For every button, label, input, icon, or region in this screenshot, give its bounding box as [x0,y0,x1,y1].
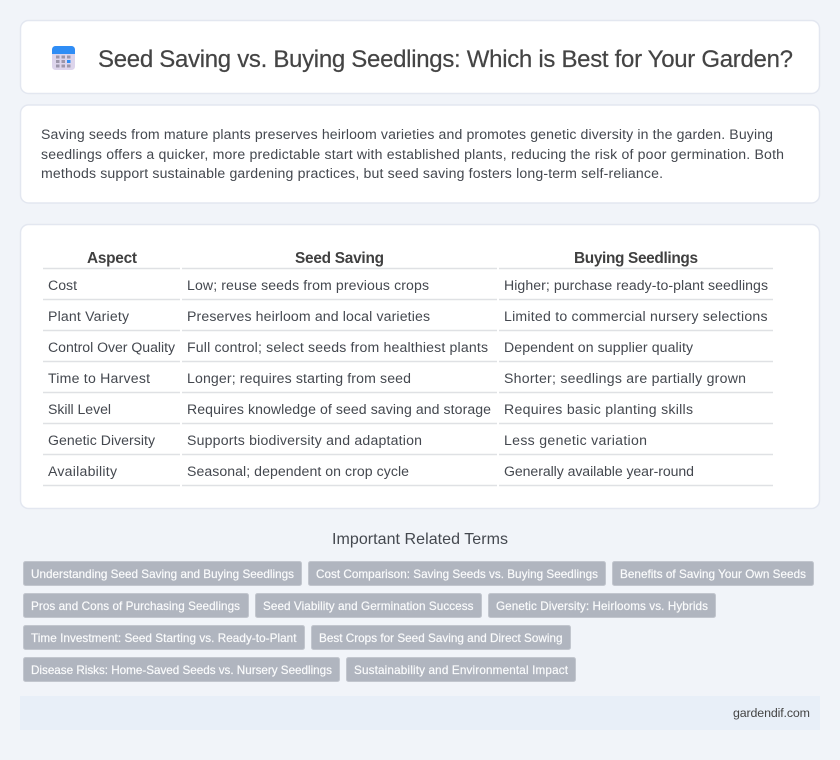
table row: availability [48,463,694,479]
text block: introduction: seedlings offers a quicker, more predictable start with established plants, reducing the risk of poor germination. Both [41,146,784,162]
tag [24,562,302,586]
tag: Benefits of Saving Your Own Seeds [620,568,806,581]
tag: Cost Comparison: Saving Seeds vs. Buying Seedlings [316,568,598,581]
table header: Seed Saving [295,250,384,267]
table row: cost: Low; reuse seeds from previous crops [187,277,429,293]
tag [312,626,570,650]
table row: genetic diversity: Less genetic variation [504,432,647,448]
table row: cost: Higher; purchase ready-to-plant seedlings [504,277,768,293]
footer [20,696,820,730]
table row: genetic diversity [48,432,647,448]
title: Seed Saving vs. Buying Seedlings: Which is Best for Your Garden? [98,46,793,73]
tag: Pros and Cons of Purchasing Seedlings [31,600,240,613]
table row: availability: Seasonal; dependent on crop cycle [187,463,409,479]
table row: time to harvest: Shorter; seedlings are partially grown [504,370,746,386]
table row: skill level: Requires knowledge of seed saving and storage [187,401,491,417]
table row: availability: Generally available year-round [504,463,694,479]
tag [24,626,304,650]
text block: introduction: Saving seeds from mature plants preserves heirloom varieties and promotes genetic diversity in the garden. Buying [41,126,773,142]
text block: introduction [41,126,784,181]
table row: plant variety: Limited to commercial nursery selections [504,308,768,324]
table row: plant variety: Plant Variety [48,308,130,324]
tag group: related terms [24,562,814,682]
tag: Sustainability and Environmental Impact [354,664,569,677]
tag: Best Crops for Seed Saving and Direct Sowing [319,632,562,645]
table row: time to harvest: Time to Harvest [48,370,150,386]
table row: control over quality: Control Over Quality [48,339,176,355]
table header [87,250,698,267]
tag [308,562,606,586]
table row: control over quality: Dependent on supplier quality [504,339,694,355]
tag: Time Investment: Seed Starting vs. Ready-to-Plant [31,632,297,645]
table row: plant variety: Preserves heirloom and local varieties [187,308,430,324]
tag: Understanding Seed Saving and Buying Seedlings [31,568,294,581]
table row: availability: Availability [48,463,118,479]
tag: Genetic Diversity: Heirlooms vs. Hybrids [496,600,708,613]
panel: introduction [20,105,820,203]
table row: cost: Cost [48,277,77,293]
panel: comparison table [20,224,820,508]
tag [488,594,716,618]
heading: important related terms: Important Related Terms [332,531,508,548]
table header: Buying Seedlings [574,250,698,267]
table header: Aspect [87,250,137,267]
table row: control over quality [48,339,694,355]
table row: genetic diversity: Supports biodiversity and adaptation [187,432,422,448]
table row: skill level [48,401,693,417]
tag: Disease Risks: Home-Saved Seeds vs. Nursery Seedlings [31,664,332,677]
tag [24,594,248,618]
panel: header [20,20,820,94]
table row: skill level: Requires basic planting skills [504,401,693,417]
tag [346,658,576,682]
table row: time to harvest [48,370,746,386]
table row: control over quality: Full control; select seeds from healthiest plants [187,339,488,355]
tag [24,658,340,682]
table row: time to harvest: Longer; requires starting from seed [187,370,411,386]
icon: calendar [52,46,75,70]
table row: plant variety [48,308,768,324]
table row: genetic diversity: Genetic Diversity [48,432,156,448]
tag [612,562,814,586]
tag [256,594,482,618]
table row: cost [48,277,768,293]
text block: introduction: methods support sustainable gardening practices, but seed saving fosters long-term self-reliance. [41,165,663,181]
tag: Seed Viability and Germination Success [263,600,474,613]
table row: skill level: Skill Level [48,401,111,417]
footer source: gardendif.com [733,706,810,720]
